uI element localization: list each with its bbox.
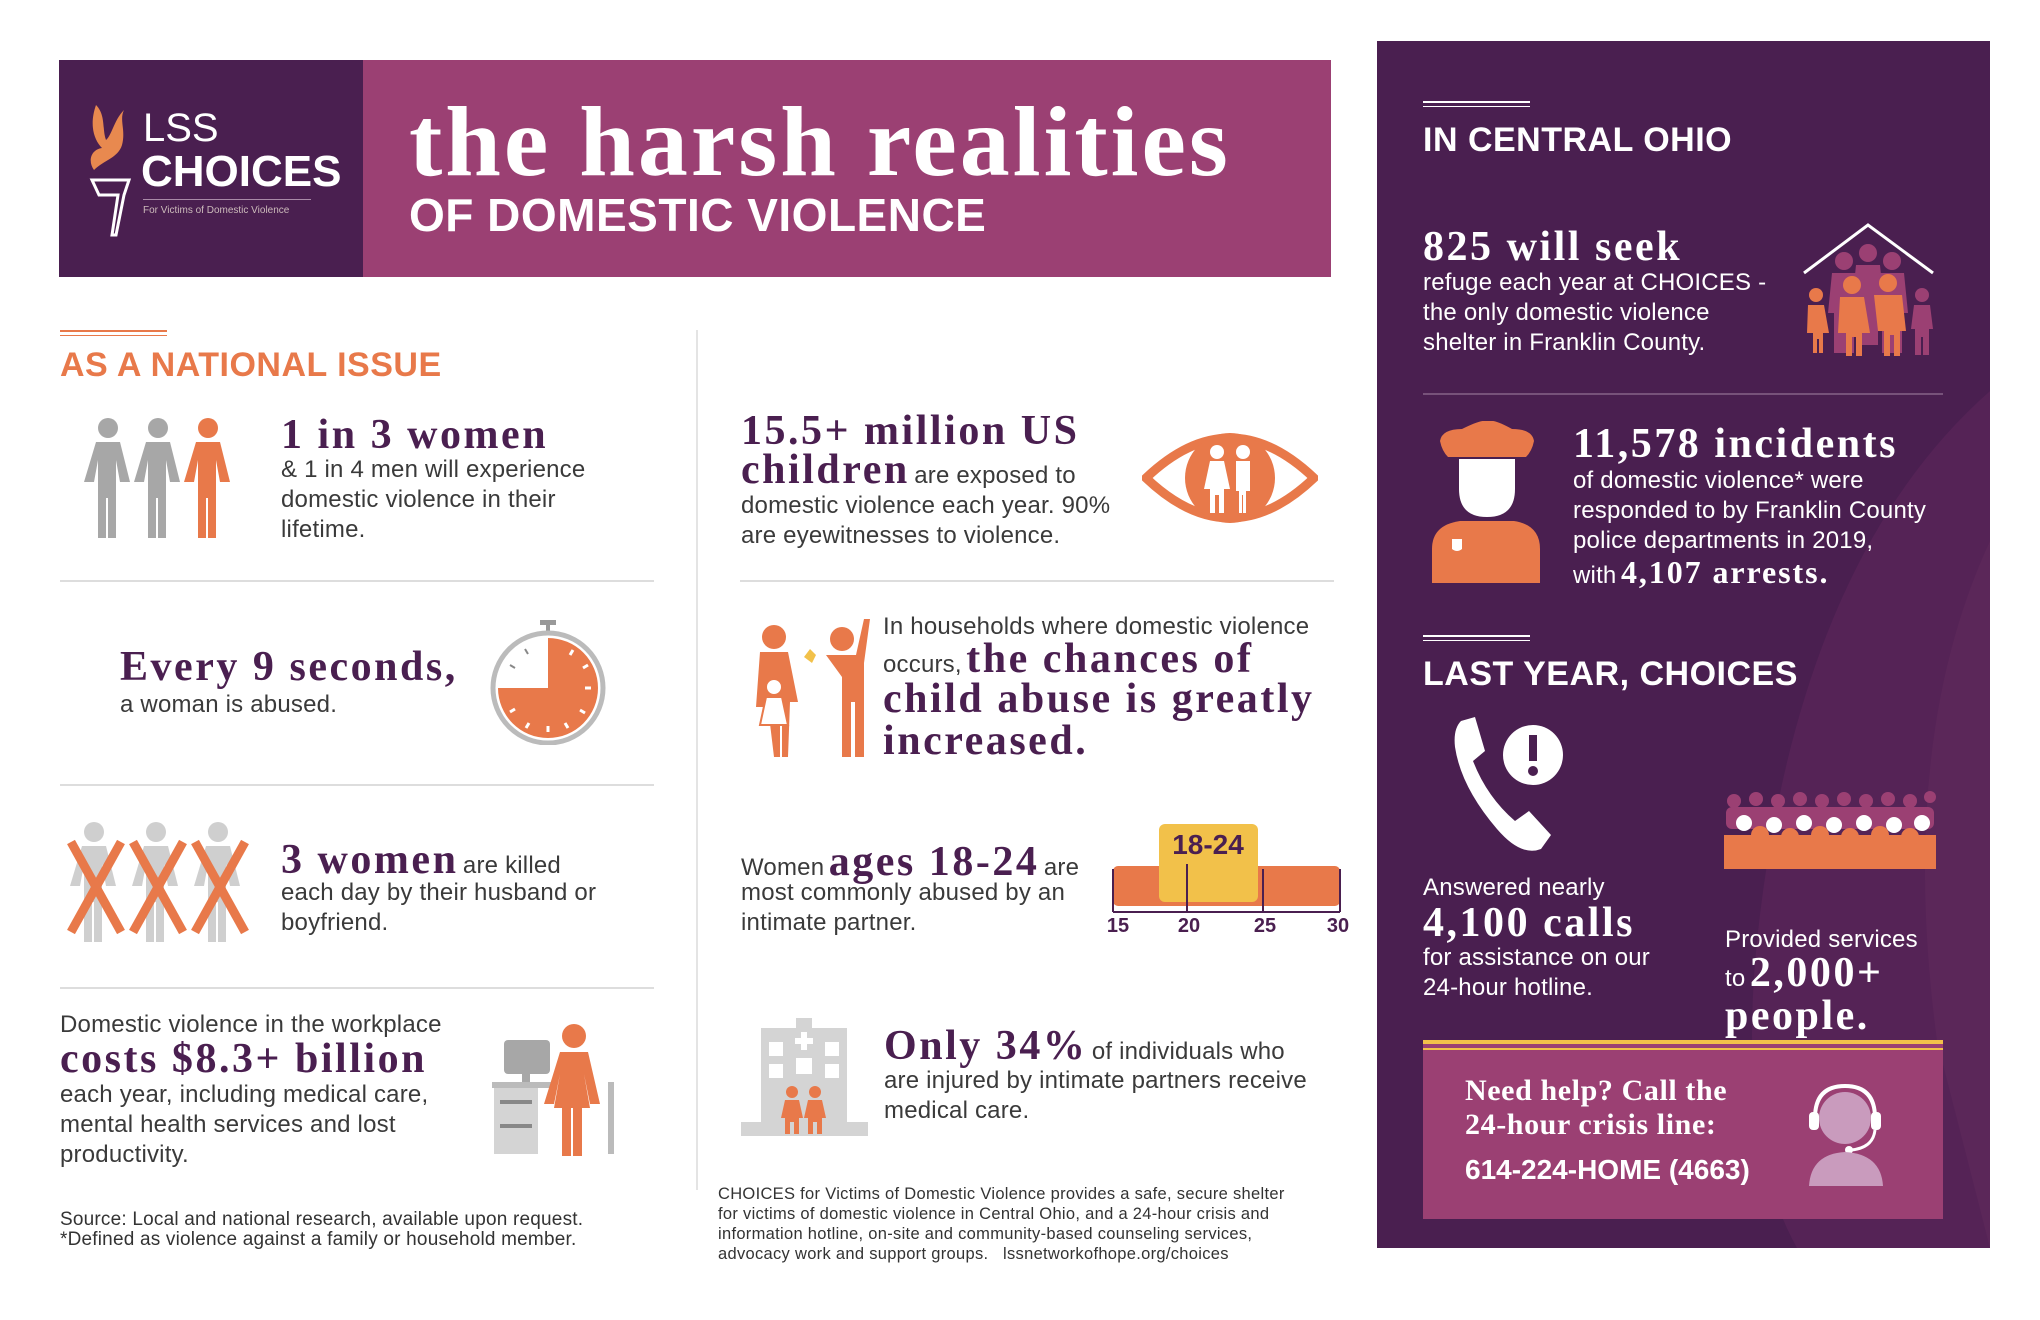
chart: age bar	[1108, 824, 1349, 934]
heading: in central ohio: IN CENTRAL OHIO	[1423, 121, 1732, 159]
stat: 3 women killed	[67, 822, 596, 942]
icon: three women	[84, 418, 230, 538]
stat: 2,000+ people: people.	[1725, 993, 1870, 1039]
stat: 4,100 calls	[1423, 717, 1650, 1001]
subtitle: OF DOMESTIC VIOLENCE	[409, 189, 986, 241]
stat: 825 will seek: refuge each year at CHOICES -	[1423, 269, 1766, 296]
stat: 825 will seek: 825 will seek	[1423, 224, 1682, 270]
icon: hospital	[741, 1018, 868, 1136]
stat: 3 women killed: boyfriend.	[281, 909, 388, 936]
stat: 3 women killed: 3 women are killed	[281, 837, 561, 883]
callout: crisis line: 614-224-HOME (4663)	[1465, 1154, 1750, 1185]
stat: child abuse: child abuse is greatly	[883, 676, 1315, 722]
stat: every 9 seconds: a woman is abused.	[120, 691, 337, 718]
stat: 4,100 calls: 4,100 calls	[1423, 900, 1635, 946]
stat: 11,578 incidents: of domestic violence* were	[1573, 467, 1864, 494]
stat: 1 in 3 women: & 1 in 4 men will experience	[281, 456, 585, 483]
stat: every 9 seconds	[120, 620, 606, 745]
stat: 15.5 million children	[741, 408, 1318, 549]
stat: 825 will seek: the only domestic violence	[1423, 299, 1710, 326]
header: logo box	[59, 60, 363, 277]
source note: Source: Local and national research, available upon request.	[60, 1209, 583, 1230]
vertical divider	[696, 330, 698, 1190]
footer about text: CHOICES for Victims of Domestic Violence provides a safe, secure shelter for victims of domestic violence in Central Ohio, and a 24-hour crisis and information hotline, on-site and community-based counseling services, advocacy work and support groups. lssnetworkofhope.org/choices	[718, 1185, 1285, 1263]
stat: 11,578 incidents: 11,578 incidents	[1573, 421, 1898, 467]
stat: child abuse: occurs, the chances of	[883, 636, 1253, 682]
icon: police officer	[1432, 421, 1540, 583]
stat: only 34%: Only 34% of individuals who	[884, 1023, 1285, 1069]
stat: workplace cost: productivity.	[60, 1141, 189, 1168]
icon: phone with exclamation	[1454, 717, 1563, 851]
stat: ages 18-24 with chart: most commonly abused by an	[741, 879, 1065, 906]
icon: crowd	[1724, 791, 1936, 869]
stat: 2,000+ people: Provided services	[1725, 926, 1918, 953]
callout: crisis line: 24-hour crisis line:	[1465, 1108, 1716, 1141]
icon: stopwatch	[490, 620, 606, 745]
stat: child abuse: increased.	[883, 718, 1088, 764]
callout: crisis line: Need help? Call the	[1465, 1074, 1727, 1107]
stat: 4,100 calls: 24-hour hotline.	[1423, 974, 1593, 1001]
stat: 3 women killed: each day by their husband or	[281, 879, 596, 906]
icon: crossed out women	[67, 822, 249, 942]
stat: 4,100 calls: Answered nearly	[1423, 874, 1605, 901]
source note: *Defined as violence against a family or household member.	[60, 1229, 576, 1250]
stat: only 34%: medical care.	[884, 1097, 1029, 1124]
icon: adult and children	[756, 619, 870, 757]
stat: 15.5 million children: children are exposed to	[741, 447, 1076, 493]
stat: only 34%	[741, 1018, 1307, 1136]
heading: last year choices: LAST YEAR, CHOICES	[1423, 655, 1798, 693]
icon: headset operator	[1809, 1084, 1883, 1186]
stat: 2,000+ people	[1724, 791, 1936, 1039]
stat: every 9 seconds: Every 9 seconds,	[120, 644, 458, 690]
stat: child abuse	[756, 613, 1315, 764]
icon: house with family	[1803, 223, 1934, 356]
stat: ages 18-24 with chart: intimate partner.	[741, 909, 916, 936]
panel: central ohio	[1377, 41, 1990, 1248]
stat: 15.5 million children: 15.5+ million US	[741, 408, 1079, 454]
stat: 1 in 3 women	[84, 412, 585, 543]
stat: 1 in 3 women: domestic violence in their	[281, 486, 556, 513]
stat: 11,578 incidents: responded to by Franklin County	[1573, 497, 1926, 524]
stat: workplace cost: Domestic violence in the workplace	[60, 1011, 442, 1038]
callout: crisis line	[1423, 1040, 1943, 1219]
stat: workplace cost: each year, including medical care,	[60, 1081, 428, 1108]
stat: workplace cost: costs $8.3+ billion	[60, 1036, 427, 1082]
stat: 825 will seek	[1423, 223, 1934, 356]
stat: 11,578 incidents: with 4,107 arrests.	[1573, 554, 1829, 590]
icon: eye with children	[1142, 433, 1318, 523]
icon: torch	[90, 105, 131, 236]
chart: age bar: 18-24	[1172, 829, 1244, 860]
header: title banner	[363, 60, 1331, 277]
stat: 15.5 million children: domestic violence each year. 90%	[741, 492, 1110, 519]
stat: 11,578 incidents	[1432, 421, 1926, 590]
stat: ages 18-24 with chart: Women ages 18-24 are	[741, 839, 1079, 885]
stat: child abuse: In households where domestic violence	[883, 613, 1309, 640]
stat: 15.5 million children: are eyewitnesses to violence.	[741, 522, 1060, 549]
header: logo box: For Victims of Domestic Violence	[143, 205, 289, 216]
header: logo box: CHOICES	[141, 147, 341, 196]
stat: 1 in 3 women: 1 in 3 women	[281, 412, 548, 458]
stat: workplace cost	[60, 1011, 614, 1168]
stat: 2,000+ people: to 2,000+	[1725, 950, 1883, 996]
stat: 1 in 3 women: lifetime.	[281, 516, 366, 543]
icon: desk and woman	[492, 1024, 614, 1156]
stat: only 34%: are injured by intimate partners receive	[884, 1067, 1307, 1094]
title: the harsh realities	[409, 86, 1231, 197]
section heading: national: AS A NATIONAL ISSUE	[60, 346, 442, 384]
stat: 4,100 calls: for assistance on our	[1423, 944, 1650, 971]
stat: 11,578 incidents: police departments in 2019,	[1573, 527, 1873, 554]
source note	[60, 1209, 583, 1250]
logo text: LSS	[143, 106, 219, 150]
stat: 825 will seek: shelter in Franklin County.	[1423, 329, 1705, 356]
stat: workplace cost: mental health services and lost	[60, 1111, 396, 1138]
stat: ages 18-24 with chart	[741, 824, 1349, 936]
